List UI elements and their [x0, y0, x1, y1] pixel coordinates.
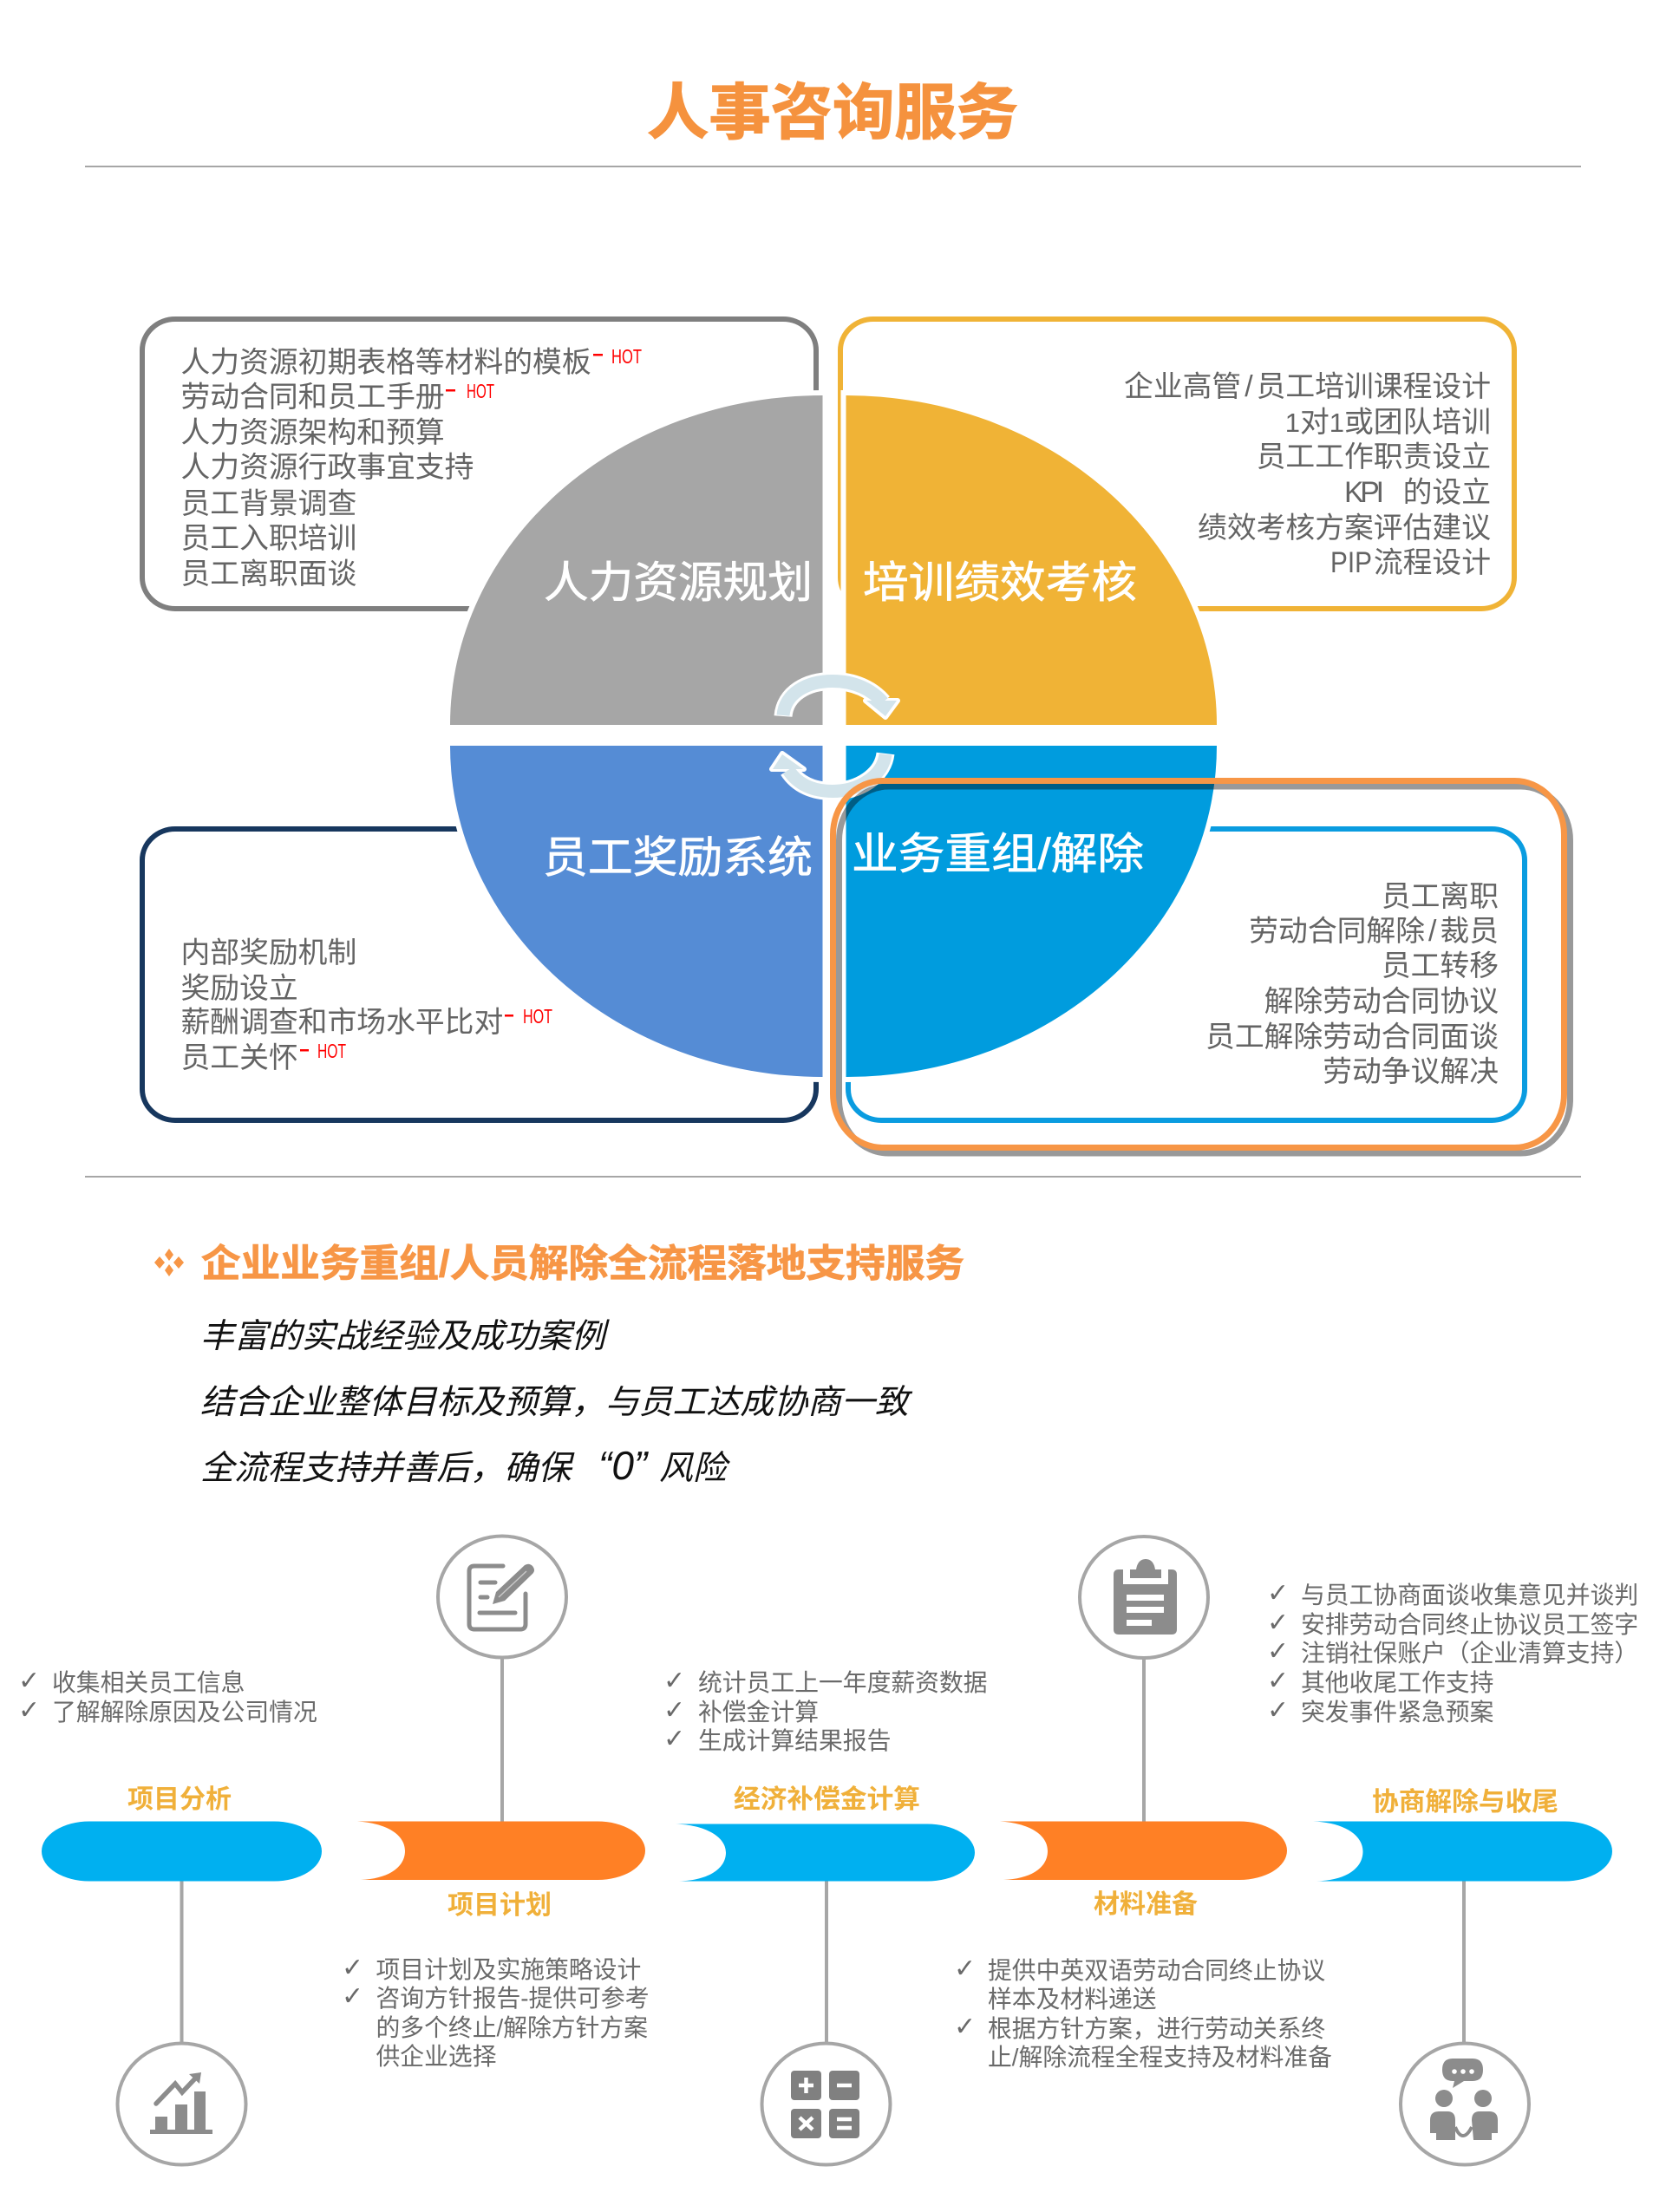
icon: chart growth — [118, 2043, 246, 2164]
tag: HOT line 4 — [300, 1040, 346, 1062]
text block: 员工奖励系统 items: 员工关怀 — [180, 1041, 298, 1074]
text block: 人力资源规划 items: 员工离职面谈 — [180, 558, 356, 591]
list: step 3: 生成计算结果报告 — [698, 1727, 891, 1754]
panel: 业务重组/解除 box — [848, 829, 1525, 1120]
text block: italic claims: 结合企业整体目标及预算，与员工达成协商一致 — [200, 1375, 913, 1424]
highlight frame shadow — [840, 786, 1570, 1153]
text block: 培训绩效考核 items: 流程设计 — [1374, 546, 1491, 579]
text block: 员工奖励系统 items: 薪酬调查和市场水平比对 — [180, 1006, 503, 1039]
list: step 4: ✓ — [954, 2012, 976, 2042]
title: 人事咨询服务 — [647, 79, 1018, 147]
icon: calculator — [761, 2043, 890, 2164]
list: step 4: 止/解除流程全程支持及材料准备 — [988, 2044, 1332, 2071]
list: step 5: 注销社保账户（企业清算支持） — [1301, 1640, 1638, 1667]
tag: HOT line 3 — [505, 1005, 552, 1028]
text block: 人力资源规划 items: 人力资源架构和预算 — [180, 416, 445, 449]
icon: clipboard — [1080, 1537, 1208, 1658]
tag: HOT line 4: HOT — [317, 1040, 346, 1062]
list: step 4: 提供中英双语劳动合同终止协议 — [988, 1957, 1325, 1984]
text block: italic claims: ，确保 — [470, 1441, 572, 1490]
list: step 1: 收集相关员工信息 — [52, 1669, 245, 1696]
list: step 5: 其他收尾工作支持 — [1301, 1669, 1493, 1696]
step 4 bar: 材料准备 — [1000, 1821, 1287, 1880]
list: step 2: 项目计划及实施策略设计 — [376, 1956, 641, 1983]
icon: negotiation people — [1401, 2043, 1529, 2164]
panel: 人力资源规划 box — [142, 319, 816, 609]
list: step 2: 供企业选择 — [376, 2043, 497, 2070]
list: step 2: 咨询方针报告-提供可参考 — [376, 1985, 650, 2012]
highlight frame — [833, 780, 1565, 1148]
list: step 5: ✓ — [1267, 1636, 1289, 1667]
quadrant: yellow — [846, 395, 1217, 725]
list: step 1: ✓ — [18, 1695, 40, 1726]
text block: 人力资源规划 items: 人力资源行政事宜支持 — [180, 451, 474, 484]
heading: 人力资源规划: 人力资源规划 — [544, 558, 813, 607]
quadrant: blue — [450, 746, 822, 1077]
list: step 3: ✓ — [663, 1666, 685, 1696]
text block: italic claims: 丰富的实战经验及成功案例 — [200, 1318, 611, 1355]
step 5 bar: 协商解除与收尾 — [1313, 1821, 1612, 1882]
text block: 业务重组/解除 items: 员工离职 — [1382, 880, 1499, 913]
arrow: lower cycle arrow — [772, 754, 885, 791]
quadrant: grey — [450, 395, 822, 725]
list: step 5: ✓ — [1267, 1695, 1289, 1726]
label: 项目分析: 项目分析 — [127, 1785, 232, 1814]
tag: HOT line 2 — [446, 380, 494, 402]
list: step 3: ✓ — [663, 1695, 685, 1726]
section heading: 企业业务重组/人员解除全流程落地支持服务 — [201, 1243, 964, 1285]
text block: 员工奖励系统 items: 内部奖励机制 — [180, 936, 356, 969]
list: step 5: ✓ — [1267, 1608, 1289, 1638]
connector lines — [182, 1659, 1464, 2042]
text block: 培训绩效考核 items: 员工工作职责设立 — [1257, 440, 1491, 473]
list: step 2 — [342, 1953, 650, 2070]
list: step 3 — [663, 1666, 988, 1754]
list: step 4: 样本及材料递送 — [988, 1986, 1157, 2013]
text block: 人力资源规划 items: 员工入职培训 — [180, 522, 356, 555]
list: step 2: ✓ — [342, 1981, 363, 2012]
list: step 2: ✓ — [342, 1953, 363, 1983]
list: step 5: 突发事件紧急预案 — [1301, 1699, 1494, 1726]
step 2 bar: 项目计划 — [357, 1821, 645, 1880]
text block: 员工奖励系统 items — [180, 936, 503, 1074]
text block: 培训绩效考核 items: 企业高管/员工培训课程设计 — [1124, 370, 1491, 403]
icon: diamond bullet — [154, 1249, 184, 1276]
label: 协商解除与收尾: 协商解除与收尾 — [1372, 1788, 1558, 1817]
text block: 培训绩效考核 items: 1对1或团队培训 — [1285, 406, 1491, 439]
list: step 4: ✓ — [954, 1954, 976, 1984]
label: 经济补偿金计算: 经济补偿金计算 — [734, 1785, 920, 1814]
text block: 业务重组/解除 items: 劳动合同解除/裁员 — [1249, 915, 1499, 948]
text block: italic claims: 全流程支持并善后 — [200, 1450, 474, 1487]
tag: HOT line 1 — [593, 345, 642, 368]
list: step 5 — [1267, 1578, 1638, 1726]
list: step 1: 了解解除原因及公司情况 — [52, 1699, 317, 1726]
chart: four quadrant ellipse — [450, 395, 1217, 1077]
list: step 4: 根据方针方案，进行劳动关系终 — [988, 2015, 1325, 2042]
tag: HOT line 3: HOT — [523, 1005, 552, 1028]
text block: 人力资源规划 items: 员工背景调查 — [180, 487, 356, 520]
list: step 2: 的多个终止/解除方针方案 — [376, 2014, 648, 2041]
text block: 业务重组/解除 items: 解除劳动合同协议 — [1264, 985, 1499, 1018]
text block: 培训绩效考核 items: 绩效考核方案评估建议 — [1198, 512, 1491, 545]
list: step 4 — [954, 1954, 1332, 2071]
heading: 员工奖励系统: 员工奖励系统 — [543, 833, 813, 882]
text block: italic claims: “0” — [598, 1443, 650, 1488]
tag: HOT line 1: HOT — [611, 345, 642, 368]
text block: 人力资源规划 items: 人力资源初期表格等材料的模板 — [180, 346, 591, 379]
heading: 业务重组/解除: 业务重组/解除 — [852, 830, 1144, 878]
list: step 1 — [18, 1666, 317, 1726]
panel: 员工奖励系统 box — [142, 829, 816, 1120]
text block: 业务重组/解除 items: 员工转移 — [1382, 949, 1499, 982]
text block: 人力资源规划 items — [180, 346, 591, 591]
label: 项目计划: 项目计划 — [448, 1891, 552, 1920]
quadrant: cyan — [846, 746, 1217, 1077]
icon: edit document — [438, 1537, 566, 1658]
step 3 bar: 经济补偿金计算 — [676, 1824, 975, 1882]
text block: 培训绩效考核 items — [1124, 370, 1491, 579]
text block: italic claims — [200, 1318, 913, 1490]
arrow: upper cycle arrow — [783, 682, 898, 717]
text block: 业务重组/解除 items: 员工解除劳动合同面谈 — [1205, 1021, 1499, 1054]
text block: italic claims: 风险 — [659, 1450, 731, 1487]
tag: HOT line 2: HOT — [467, 380, 494, 402]
list: step 5: ✓ — [1267, 1578, 1289, 1608]
step 1 bar: 项目分析 — [42, 1821, 322, 1882]
text block: 培训绩效考核 items: KPI — [1344, 476, 1384, 509]
list: step 5: ✓ — [1267, 1666, 1289, 1696]
label: 材料准备: 材料准备 — [1094, 1890, 1198, 1919]
text block: 业务重组/解除 items — [1205, 880, 1499, 1088]
heading: 培训绩效考核: 培训绩效考核 — [863, 558, 1137, 607]
text block: 人力资源规划 items: 劳动合同和员工手册 — [180, 381, 445, 414]
list: step 1: ✓ — [18, 1666, 40, 1696]
text block: 业务重组/解除 items: 劳动争议解决 — [1323, 1055, 1499, 1088]
list: step 3: ✓ — [663, 1724, 685, 1754]
text block: 培训绩效考核 items: PIP — [1330, 546, 1372, 579]
list: step 5: 安排劳动合同终止协议员工签字 — [1301, 1611, 1638, 1638]
list: step 3: 统计员工上一年度薪资数据 — [698, 1669, 988, 1696]
text block: 培训绩效考核 items: 的设立 — [1403, 476, 1491, 509]
list: step 5: 与员工协商面谈收集意见并谈判 — [1301, 1582, 1638, 1608]
panel: 培训绩效考核 box — [840, 319, 1514, 609]
text block: 员工奖励系统 items: 奖励设立 — [180, 972, 298, 1005]
list: step 3: 补偿金计算 — [698, 1699, 819, 1726]
